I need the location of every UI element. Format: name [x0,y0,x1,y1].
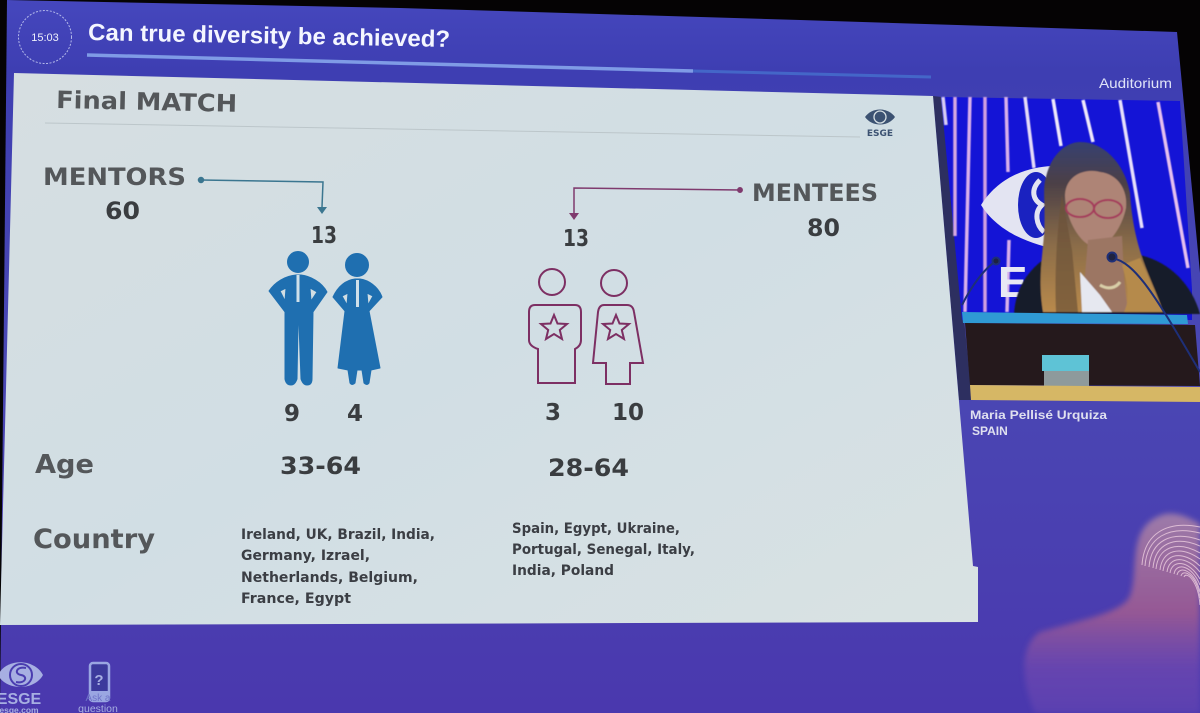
ESGE slide logo [865,110,895,139]
mentees countries: Spain, Egypt, Ukraine, [512,521,680,537]
slide subtitle: Final MATCH [56,86,237,118]
mentees selected count: 13 [563,226,589,252]
mentors countries: Germany, Izrael, [241,548,370,564]
speaker name: Maria Pellisé Urquiza [970,408,1107,422]
mentors countries: Netherlands, Belgium, [241,570,418,586]
icon: male mentee [529,269,581,383]
mentees countries: India, Poland [512,563,614,579]
mentees countries [512,521,695,579]
mentors male count: 9 [284,401,300,427]
timer badge [18,10,72,64]
mentees male count: 3 [545,400,561,426]
icon: female mentee [593,270,643,384]
lectern badge [1042,355,1089,386]
panel: slide [0,73,978,625]
mentees age range: 28-64 [548,454,629,482]
mentors female count: 4 [347,401,363,427]
mentors countries: France, Egypt [241,591,351,607]
icon: male mentor [269,252,327,385]
mentees total: 80 [807,214,840,242]
footer ESGE logo [0,662,43,713]
footer ask a question icon [78,663,118,713]
mentors countries: Ireland, UK, Brazil, India, [241,527,435,543]
mentees heading: MENTEES [752,179,878,207]
speaker [1014,142,1200,314]
speaker name [970,408,1107,438]
mentors arrow [198,178,327,214]
panel: speaker video [933,96,1200,402]
lectern body [965,323,1200,386]
lectern gold edge [970,385,1200,402]
bottom-right wave decoration [1024,514,1200,713]
glasses [1066,199,1122,218]
footer ask a question icon: Ask a [85,693,111,704]
mentors countries [241,527,435,607]
video blue backdrop [941,97,1192,320]
backdrop stripes [943,97,1188,312]
mentors selected count: 13 [311,223,337,249]
ESGE slide logo: ESGE [867,129,893,139]
mentors heading: MENTORS [43,163,186,191]
mentees countries: Portugal, Senegal, Italy, [512,542,695,558]
footer ask a question icon: ? [94,672,104,689]
slide title: Can true diversity be achieved? [88,19,450,52]
lectern top [962,312,1188,324]
mentees arrow [569,188,742,220]
slide sheet [0,73,978,625]
video dark side band [933,96,972,400]
icon: female mentor [333,254,382,384]
speaker name: SPAIN [972,424,1008,438]
room label: Auditorium [1099,75,1172,91]
backdrop eye logo [981,166,1060,307]
mentees female count: 10 [612,400,644,426]
title progress bar [87,55,931,77]
backdrop eye logo: E [998,258,1027,307]
country label: Country [33,524,155,555]
mentors total: 60 [105,197,140,225]
timer badge: 15:03 [31,32,59,44]
mentors age range: 33-64 [280,452,361,480]
age label: Age [35,450,94,480]
microphones [962,252,1200,372]
